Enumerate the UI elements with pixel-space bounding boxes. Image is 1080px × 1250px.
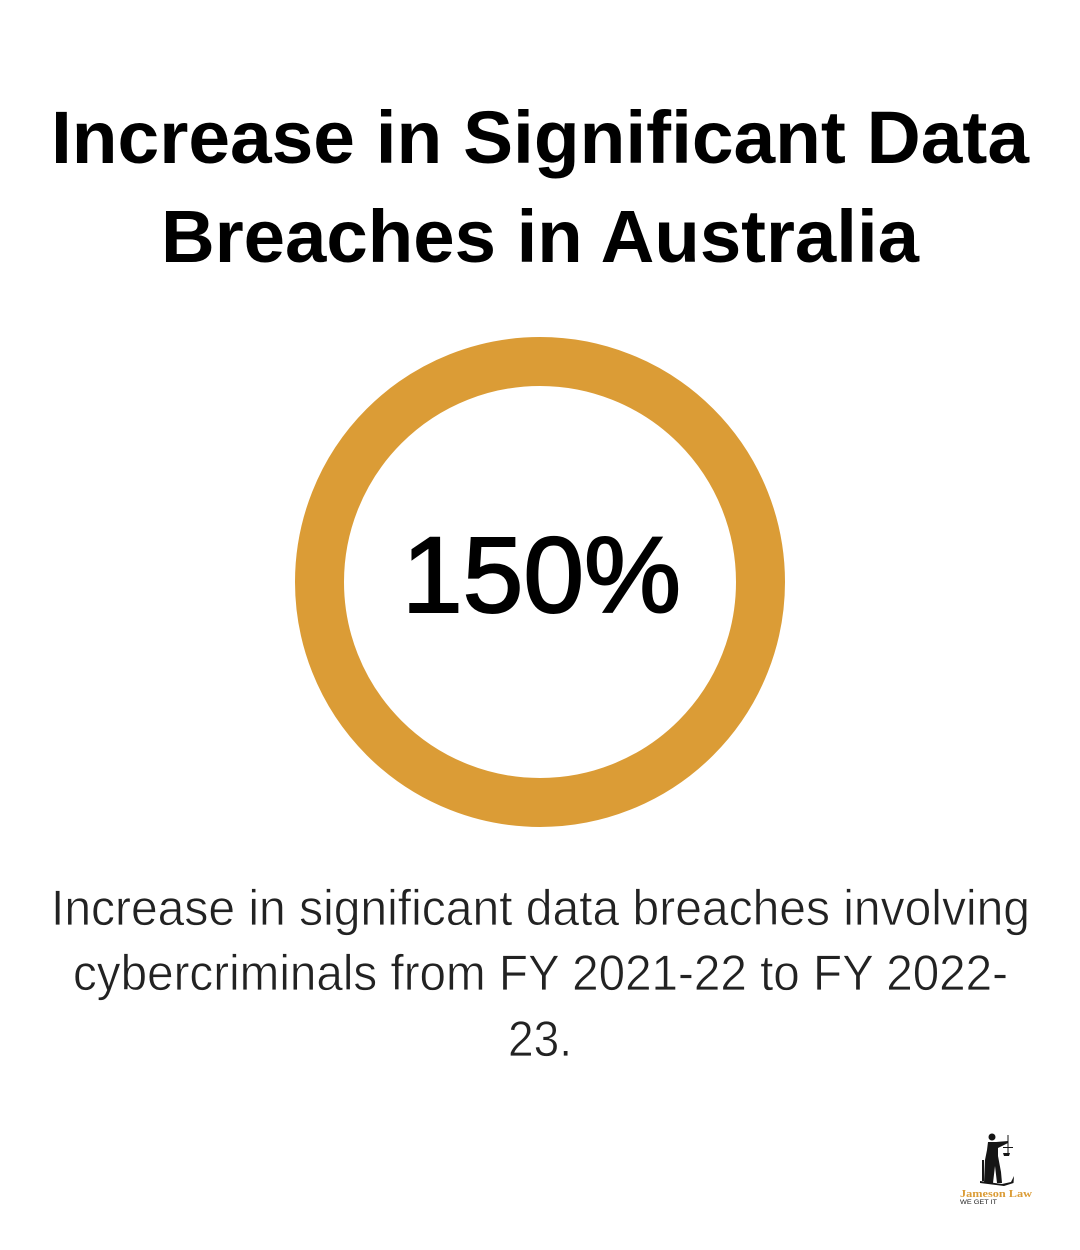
description: 23. (508, 1011, 572, 1067)
title (51, 96, 1030, 278)
title: Breaches in Australia (161, 195, 920, 278)
title: Increase in Significant Data (51, 96, 1030, 179)
logo tagline: WE GET IT (960, 1199, 997, 1206)
value: 150%: 150% (402, 514, 681, 635)
description (51, 880, 1030, 1067)
description: cybercriminals from FY 2021-22 to FY 2022- (73, 945, 1008, 1001)
description: Increase in significant data breaches involving (51, 880, 1030, 936)
logo name: Jameson Law (960, 1188, 1032, 1200)
logo: Jameson Law (960, 1134, 1032, 1206)
icon: lady justice (980, 1134, 1014, 1186)
donut ring (320, 362, 760, 802)
